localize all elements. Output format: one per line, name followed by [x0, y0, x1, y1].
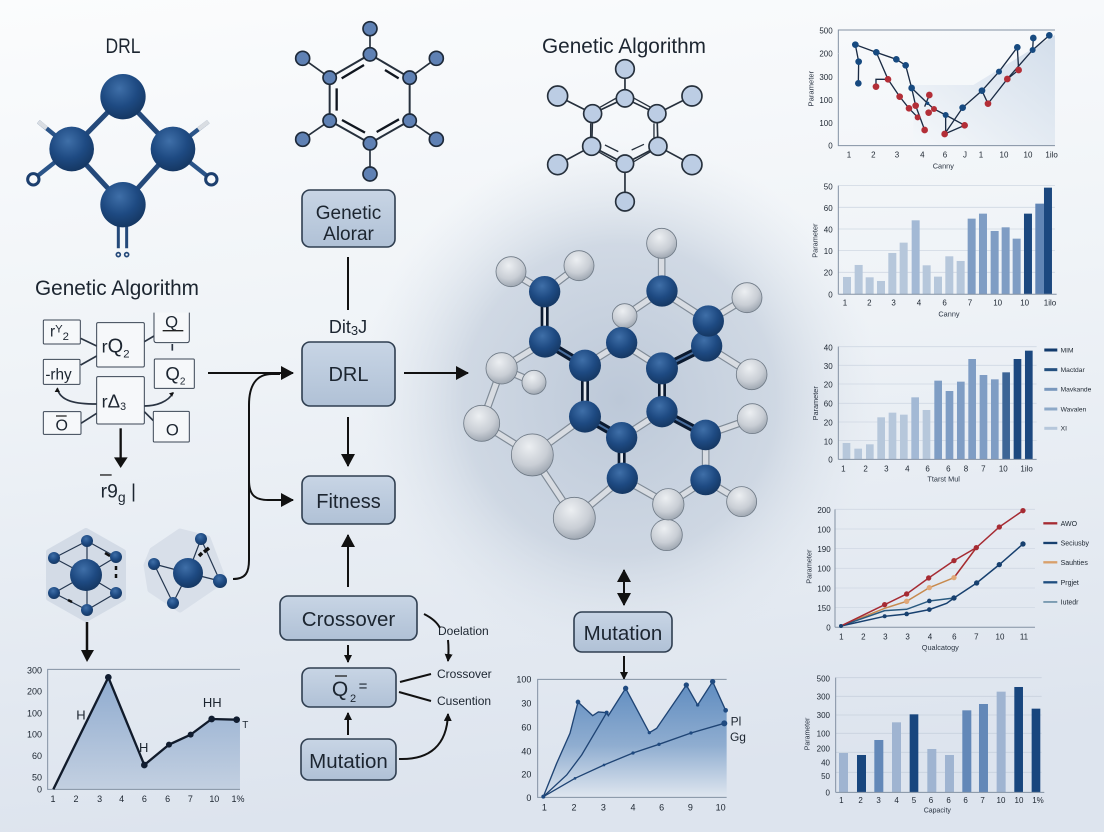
flow diagram: formula boxes: 2 — [63, 331, 69, 343]
arrow: Genetic diagram to DRL — [208, 372, 293, 374]
bar chart: bottom right: 100 — [817, 729, 831, 738]
line chart: fourth right: 190 — [817, 545, 831, 554]
molecule: hexagon light nodes — [548, 60, 702, 211]
line chart: top right: 4 — [920, 151, 925, 160]
line chart: top right: 3 — [895, 151, 900, 160]
line chart: top right: 1 — [979, 151, 984, 160]
area chart: middle: 60 — [521, 723, 531, 733]
flow diagram: formula boxes: g — [118, 489, 126, 505]
bar chart: bottom right: 6 — [946, 796, 951, 805]
area chart: middle: 20 — [521, 770, 531, 780]
bar chart: third right — [811, 343, 1092, 484]
arrowhead: area chart — [81, 650, 94, 662]
area chart: middle: 6 — [659, 803, 664, 813]
small molecule left — [48, 531, 123, 619]
bar chart: bottom right: 10 — [1015, 796, 1024, 805]
flow diagram: formula boxes: Y — [55, 324, 63, 336]
bar chart: third right: 1ilo — [1020, 464, 1033, 473]
bar chart: third right: Mavkande — [1061, 387, 1092, 394]
line chart: fourth right: Parameter — [805, 549, 814, 584]
area chart: left: 4 — [119, 794, 124, 804]
line chart: top right: 6 — [943, 151, 948, 160]
area chart: left: 1% — [231, 794, 244, 804]
flow diagram: formula boxes: rQ — [102, 336, 123, 358]
flow diagram: formula boxes: 2 — [123, 348, 130, 360]
arrow: DRL to Fitness — [347, 417, 349, 466]
line chart: fourth right: Qualcatogy — [922, 643, 959, 652]
line chart: fourth right — [805, 506, 1089, 652]
area chart: left: 100 — [27, 730, 42, 740]
bar chart: bottom right: 300 — [817, 693, 831, 702]
bar chart: second right: 1ilo — [1044, 299, 1057, 308]
flow diagram: formula boxes: O — [166, 421, 179, 440]
bar chart: third right: Wavalen — [1061, 406, 1087, 413]
bar chart: bottom right: 1% — [1032, 796, 1044, 805]
side connectors — [399, 614, 448, 759]
line chart: fourth right: 10 — [996, 632, 1005, 641]
bar chart: second right: 10 — [993, 299, 1003, 308]
box: Mutation right — [574, 612, 672, 652]
bar chart: bottom right: Capacity — [924, 808, 951, 815]
bar chart: second right: 3 — [891, 299, 896, 308]
area chart: middle: 0 — [526, 793, 531, 803]
bar chart: third right: 6 — [946, 464, 951, 473]
label: Dit3J: Dit — [329, 317, 351, 337]
line chart: top right: 2 — [871, 151, 876, 160]
box: Fitness — [302, 476, 395, 524]
bar chart: bottom right: 7 — [980, 796, 985, 805]
area chart: left: HH — [203, 695, 222, 710]
line chart: fourth right: 3 — [905, 632, 910, 641]
flow diagram: formula boxes: rΔ — [102, 390, 120, 411]
arrow: DRL to central molecule — [404, 372, 468, 374]
bar chart: bottom right: 4 — [894, 796, 899, 805]
bar chart: third right: 20 — [824, 419, 833, 428]
box: Crossover — [280, 596, 417, 640]
bar chart: bottom right: 5 — [912, 796, 917, 805]
bar chart: second right: 10 — [1020, 299, 1030, 308]
area chart: middle: 4 — [630, 803, 635, 813]
line chart: top right: 1ilo — [1045, 151, 1058, 160]
area chart: left: 2 — [73, 794, 78, 804]
bar chart: second right: 50 — [824, 182, 833, 191]
box: DRL — [302, 342, 395, 406]
bar chart: third right: 40 — [824, 343, 833, 352]
bar chart: bottom right: 0 — [826, 788, 831, 797]
line chart: fourth right: 3 — [883, 632, 888, 641]
area chart: middle: Gg — [730, 730, 746, 744]
line chart: fourth right: 2 — [861, 632, 866, 641]
line chart: fourth right: 7 — [974, 632, 979, 641]
small molecule right — [146, 531, 227, 610]
box: Genetic Alorar: Alorar — [323, 224, 375, 245]
bar chart: bottom right: 3 — [876, 796, 881, 805]
arrow: bracket to DRL and Fitness — [233, 374, 293, 579]
bar chart: second right: 60 — [824, 204, 833, 213]
bar chart: bottom right — [805, 675, 1044, 815]
area chart: middle: 10 — [716, 803, 726, 813]
line chart: top right: 500 — [819, 27, 833, 36]
area chart: middle: 1 — [542, 803, 547, 813]
line chart: top right: Parameter — [806, 70, 815, 107]
line chart: fourth right: 4 — [928, 632, 933, 641]
area chart: middle: 3 — [601, 803, 606, 813]
label: Dit3J: 3 — [351, 323, 358, 338]
area chart: left: 10 — [209, 794, 219, 804]
line chart: fourth right: Sauhties — [1061, 560, 1088, 567]
box: Crossover: Crossover — [302, 608, 395, 631]
line chart: fourth right: Iutedr — [1061, 600, 1079, 607]
line chart: fourth right: 0 — [826, 623, 831, 632]
bar chart: second right: 7 — [968, 299, 973, 308]
flow diagram: formula boxes: r — [50, 324, 55, 341]
line chart: top right: 10 — [1024, 151, 1033, 160]
bar chart: third right: 20 — [824, 381, 833, 390]
area chart: middle: 40 — [521, 746, 531, 756]
area chart: middle: Pl — [731, 714, 741, 728]
side labels: Doelation Crossover Cusention: Crossover — [437, 667, 492, 681]
bar chart: third right: Parameter — [811, 386, 820, 420]
line chart: fourth right: 100 — [817, 565, 831, 574]
line chart: fourth right: Seciusby — [1061, 541, 1089, 548]
line chart: top right: J — [963, 151, 967, 160]
central molecule — [464, 228, 767, 551]
line chart: fourth right: 1 — [839, 632, 844, 641]
bar chart: third right: 1 — [841, 464, 846, 473]
area chart: left: 50 — [32, 772, 42, 782]
area chart: left — [27, 665, 248, 804]
flow diagram: formula boxes: 3 — [120, 401, 126, 413]
area chart: left: H — [76, 707, 86, 722]
bar chart: third right: 60 — [824, 400, 833, 409]
bar chart: bottom right: 300 — [817, 711, 831, 720]
area chart: left: 100 — [27, 708, 42, 718]
area chart: middle: 2 — [571, 803, 576, 813]
bar chart: third right: 8 — [964, 464, 969, 473]
line chart: fourth right: Prgjet — [1061, 580, 1079, 587]
area chart: middle: 30 — [521, 699, 531, 709]
flow diagram: formula boxes: Q — [165, 363, 180, 384]
label: Dit3J: J — [358, 317, 367, 337]
box: Mutation left — [301, 739, 396, 780]
side labels: Doelation Crossover Cusention: Doelation — [438, 624, 489, 638]
area chart: middle — [516, 675, 746, 813]
bar chart: second right: 1 — [843, 299, 848, 308]
bar chart: third right: Ttarst Mul — [927, 475, 960, 484]
bar chart: second right: 20 — [824, 269, 833, 278]
flow diagram: formula boxes: | — [126, 481, 136, 502]
line chart: top right: 1 — [847, 151, 852, 160]
bar chart: second right: 6 — [942, 299, 947, 308]
arrow: small molecule to area chart — [86, 622, 88, 650]
arrow: Mutation to area chart — [623, 656, 625, 679]
area chart: left: 1 — [50, 794, 55, 804]
bar chart: third right: 10 — [824, 437, 833, 446]
bar chart: third right: 10 — [999, 464, 1008, 473]
flow diagram: formula boxes: O — [55, 418, 68, 435]
area chart: left: 6 — [142, 794, 147, 804]
title: Genetic Algorithm left: Genetic Algorithm — [35, 277, 199, 300]
line chart: top right: 10 — [1000, 151, 1009, 160]
bar chart: bottom right: 500 — [817, 675, 831, 684]
bar chart: third right: 0 — [828, 456, 833, 465]
box: Q2: Q — [332, 678, 348, 701]
box: Genetic Alorar: Genetic — [316, 203, 381, 224]
bar chart: second right: 2 — [867, 299, 872, 308]
line chart: fourth right: 6 — [952, 632, 957, 641]
title: Genetic Algorithm top: Genetic Algorithm — [542, 35, 706, 58]
flow diagram: formula boxes: -rhy — [45, 366, 72, 383]
flow diagram: formula boxes: 2 — [180, 377, 186, 388]
molecule: DRL navy ring — [28, 74, 217, 257]
box: Genetic Alorar — [302, 190, 395, 247]
flow diagram: formula boxes: Q — [165, 312, 178, 331]
line chart: fourth right: AWO — [1061, 521, 1078, 528]
bar chart: second right: Parameter — [810, 223, 819, 258]
bar chart: bottom right: 6 — [929, 796, 934, 805]
line chart: top right: 100 — [819, 96, 833, 105]
bar chart: third right: 7 — [981, 464, 986, 473]
box: Q2: = — [359, 678, 368, 695]
bar chart: third right: 30 — [824, 362, 833, 371]
area chart: middle: 100 — [516, 675, 531, 685]
box: Q2 — [302, 668, 396, 707]
bar chart: third right: 4 — [905, 464, 910, 473]
line chart: top right: 0 — [828, 141, 833, 150]
area chart: left: 0 — [37, 785, 42, 795]
line chart: fourth right: 11 — [1020, 632, 1029, 641]
arrow: Crossover to Q2 — [347, 645, 349, 662]
bar chart: bottom right: 2 — [858, 796, 863, 805]
bar chart: bottom right: 10 — [997, 796, 1006, 805]
line chart: fourth right: 200 — [817, 506, 831, 515]
bar chart: bottom right: 200 — [817, 745, 831, 754]
bar chart: third right: 2 — [863, 464, 868, 473]
line chart: fourth right: 150 — [817, 604, 831, 613]
side labels: Doelation Crossover Cusention: Cusention — [437, 694, 491, 708]
box: Mutation left: Mutation — [309, 750, 388, 773]
double arrow: molecule to Mutation — [623, 570, 625, 605]
side labels: Doelation Crossover Cusention — [437, 624, 492, 708]
title: DRL: DRL — [106, 35, 140, 58]
area chart: left: 3 — [97, 794, 102, 804]
bar chart: bottom right: Parameter — [805, 717, 812, 750]
area chart: left: 300 — [27, 665, 42, 675]
area chart: middle: 9 — [688, 803, 693, 813]
bar chart: bottom right: 6 — [963, 796, 968, 805]
flow diagram: formula boxes — [43, 312, 194, 505]
bar chart: bottom right: 50 — [821, 772, 831, 781]
area chart: left: H — [139, 740, 148, 755]
bar chart: second right: Canny — [938, 310, 960, 319]
box: DRL: DRL — [328, 364, 369, 386]
flow diagram: formula boxes: r9 — [101, 481, 118, 502]
bar chart: second right: 4 — [917, 299, 922, 308]
bar chart: bottom right: 1 — [839, 796, 844, 805]
area chart: left: 6 — [165, 794, 170, 804]
line chart: top right: 100 — [819, 119, 833, 128]
bar chart: third right: 3 — [884, 464, 889, 473]
box: Mutation right: Mutation — [584, 622, 662, 645]
molecule: hexagon dark nodes — [296, 22, 443, 181]
arrow: Mutation to Q2 — [347, 713, 349, 735]
bar chart: bottom right: 40 — [821, 758, 831, 767]
bar chart: third right: 6 — [925, 464, 930, 473]
bar chart: third right: XI — [1061, 426, 1067, 433]
line chart: top right — [806, 27, 1058, 170]
bar chart: third right: MIM — [1061, 347, 1074, 354]
bar chart: second right — [810, 182, 1057, 319]
area chart: left: 60 — [32, 751, 42, 761]
line chart: top right: 300 — [819, 73, 833, 82]
line chart: fourth right: 100 — [817, 526, 831, 535]
line chart: top right: 200 — [819, 50, 833, 59]
box: Fitness: Fitness — [316, 491, 381, 513]
bar chart: second right: 0 — [828, 291, 833, 300]
box: Q2: 2 — [350, 693, 356, 705]
area chart: left: 200 — [27, 687, 42, 697]
arrow: Genetic Alorar to DRL — [347, 257, 349, 310]
bar chart: second right: 10 — [824, 247, 833, 256]
bar chart: second right: 40 — [824, 226, 833, 235]
area chart: left: T — [242, 720, 248, 731]
bar chart: third right: Mactdar — [1061, 367, 1085, 374]
arrow: Crossover to Fitness — [347, 535, 349, 587]
area chart: left: 7 — [188, 794, 193, 804]
line chart: fourth right: 100 — [817, 584, 831, 593]
line chart: top right: Canny — [933, 161, 954, 170]
